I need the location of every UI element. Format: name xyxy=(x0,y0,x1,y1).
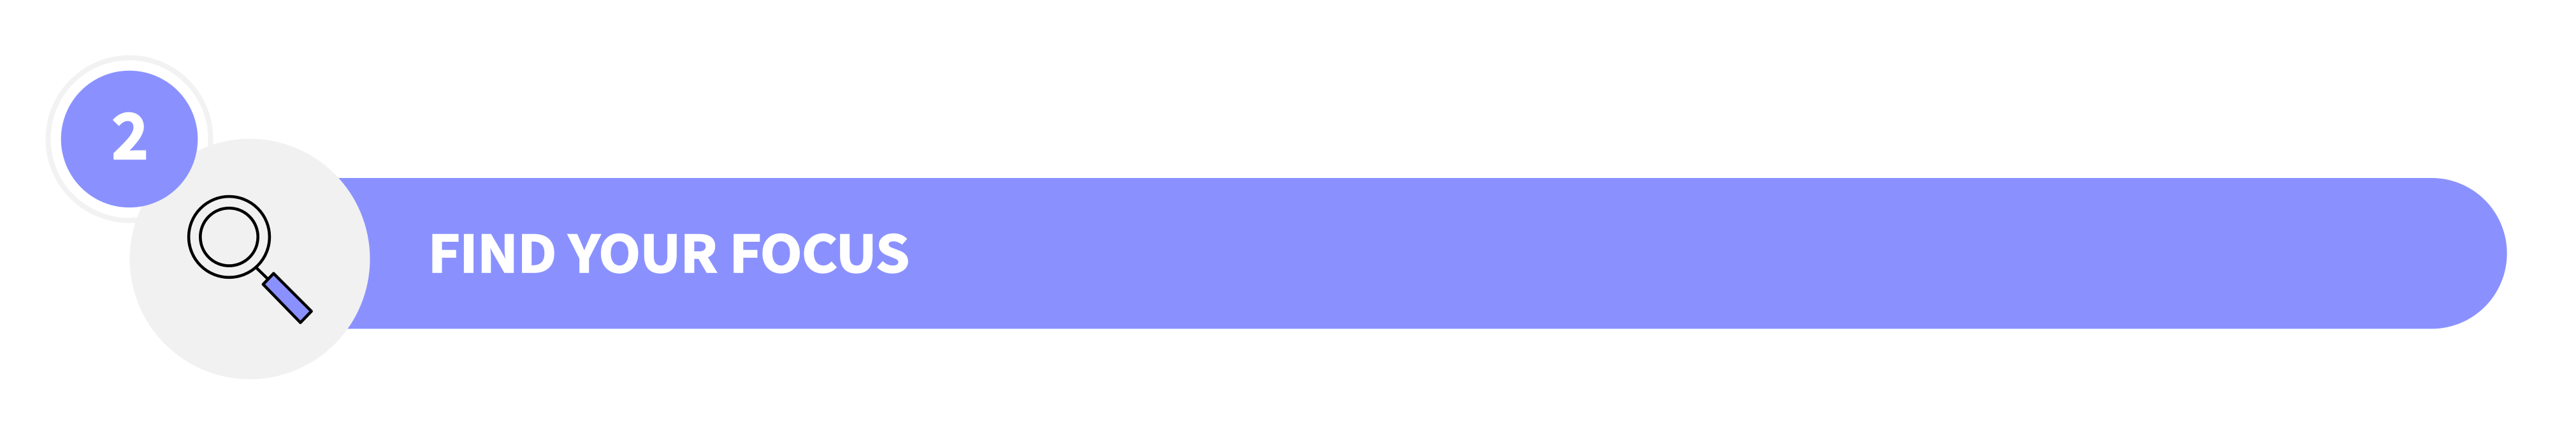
heading text: FIND YOUR FOCUS xyxy=(428,213,909,287)
handle grip xyxy=(263,274,312,323)
step number: 2 xyxy=(112,87,148,177)
outer ring of number badge xyxy=(48,57,210,221)
icon: magnifying glass xyxy=(189,196,312,323)
lens outer rim xyxy=(189,196,270,278)
heading bar xyxy=(287,178,2507,329)
icon background circle xyxy=(130,139,370,379)
handle neck xyxy=(256,268,268,279)
number badge circle xyxy=(61,71,198,207)
lens inner rim xyxy=(200,208,258,266)
